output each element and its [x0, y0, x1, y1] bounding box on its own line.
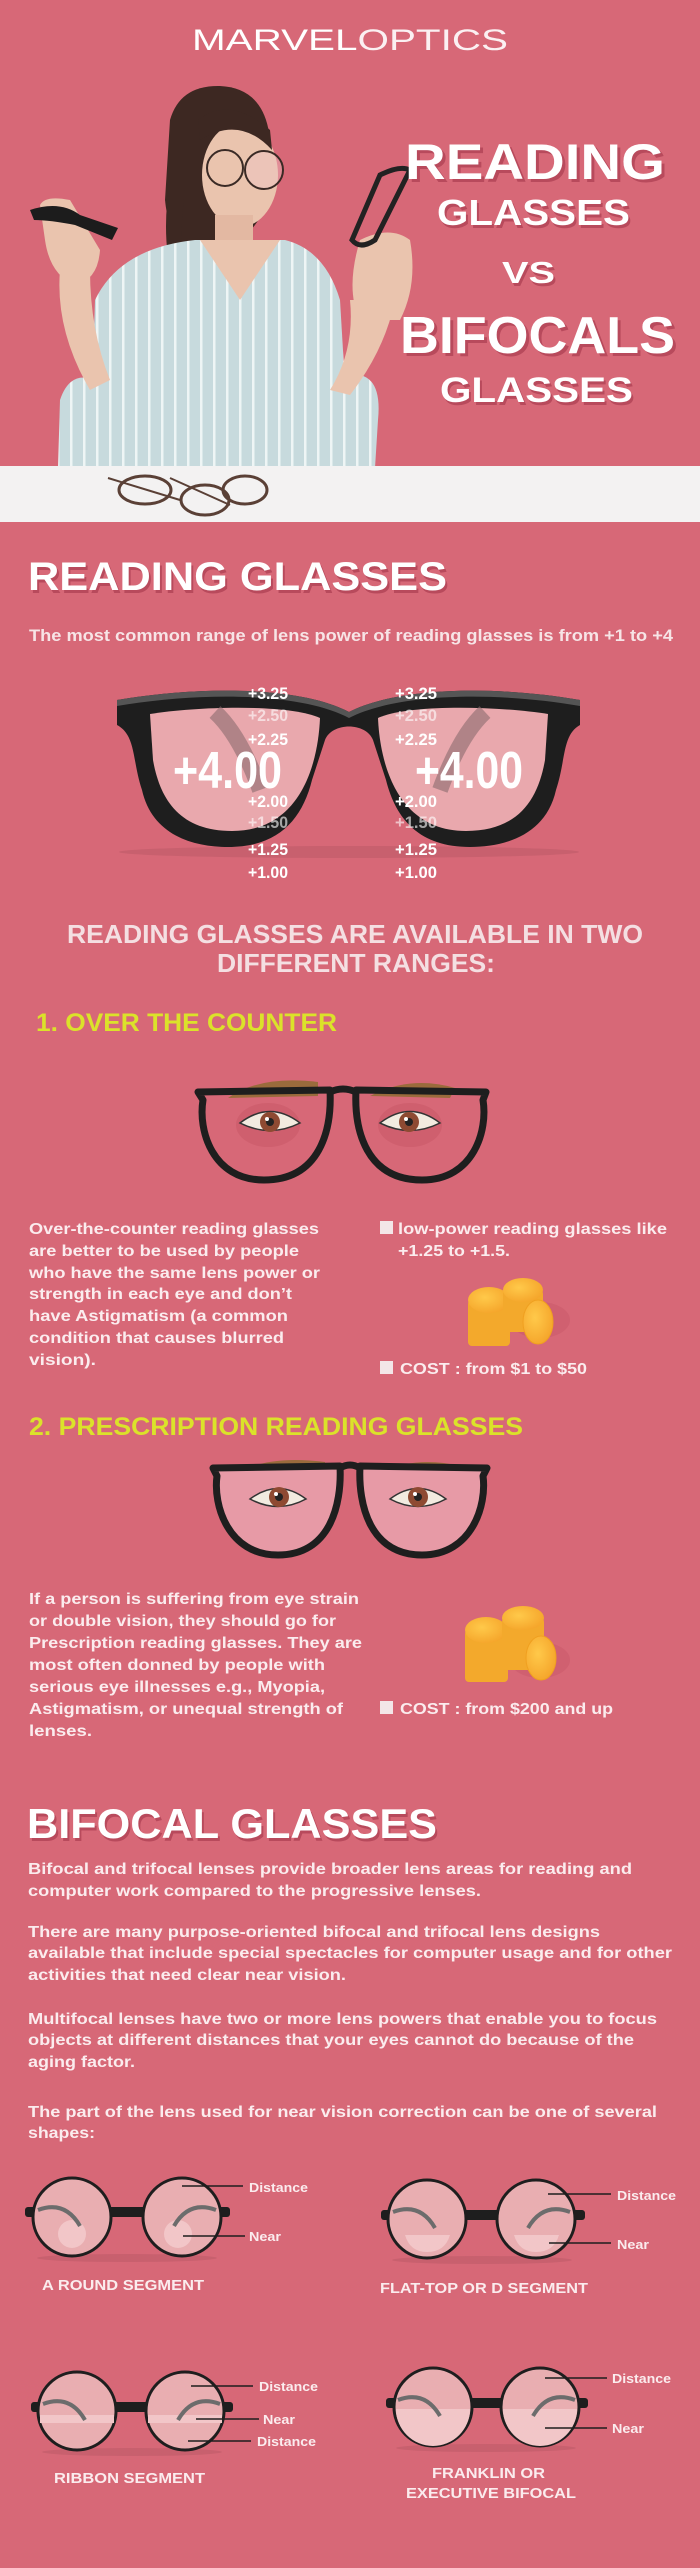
- diagram: ribbon segment: Near: [263, 2412, 295, 2427]
- heading: two ranges: DIFFERENT RANGES:: [217, 948, 495, 978]
- big glasses with lens powers: +2.25: [395, 730, 437, 749]
- big glasses with lens powers: +2.50: [248, 706, 288, 725]
- diagram: round segment: A ROUND SEGMENT: [42, 2278, 204, 2294]
- big glasses with lens powers: +1.00: [395, 863, 437, 882]
- text: bifocal description: available that include special spectacles for computer usage and for other: [28, 1945, 672, 1962]
- bullet: low power: [380, 1221, 667, 1260]
- icon: coins: [468, 1278, 570, 1346]
- big glasses with lens powers: +2.00: [395, 792, 437, 811]
- title: GLASSES: [437, 192, 630, 233]
- diagram: flat-top segment: Distance: [617, 2188, 676, 2203]
- subtitle: lens power range: The most common range of lens power of reading glasses is from +1 to +4: [29, 626, 674, 645]
- heading: reading glasses: READING GLASSES: [30, 558, 449, 602]
- diagram: flat-top segment: [380, 2180, 676, 2297]
- text: over the counter description: condition that causes blurred: [29, 1330, 284, 1347]
- text: prescription description: serious eye illnesses e.g., Myopia,: [29, 1679, 325, 1696]
- text: bifocal description: Bifocal and trifocal lenses provide broader lens areas for reading and: [28, 1861, 632, 1878]
- big glasses with lens powers: +3.25: [395, 684, 437, 703]
- text: prescription description: [29, 1591, 362, 1740]
- text: bifocal description: activities that need clear near vision.: [28, 1967, 346, 1984]
- brand logo: MARVEL OPTICS: [192, 24, 508, 57]
- diagram: round segment: Distance: [249, 2180, 308, 2195]
- cost prescription: COST : from $200 and up: [400, 1701, 613, 1718]
- photo: woman holding glasses: [30, 86, 412, 468]
- text: over the counter description: [28, 1221, 320, 1369]
- diagram: flat-top segment: FLAT-TOP OR D SEGMENT: [380, 2281, 588, 2297]
- title: GLASSES: [439, 195, 632, 236]
- text: prescription description: If a person is suffering from eye strain: [29, 1591, 359, 1608]
- title: [400, 134, 678, 413]
- title: READING: [405, 134, 665, 190]
- heading: bifocal glasses: BIFOCAL GLASSES: [29, 1803, 439, 1850]
- text: over the counter description: are better to be used by people: [29, 1243, 299, 1260]
- diagram: franklin / executive bifocal: EXECUTIVE BIFOCAL: [406, 2486, 576, 2502]
- text: over the counter description: who have the same lens power or: [28, 1265, 320, 1282]
- title: BIFOCALS: [403, 310, 678, 368]
- text: prescription description: lenses.: [29, 1723, 92, 1740]
- subheading: over the counter: 1. OVER THE COUNTER: [36, 1009, 337, 1037]
- big glasses with lens powers: +1.50: [395, 813, 437, 832]
- title: VS: [504, 258, 557, 293]
- text: bifocal description: shapes:: [28, 2125, 95, 2142]
- title: VS: [502, 255, 555, 290]
- title: READING: [408, 137, 668, 193]
- table with glasses: [0, 466, 700, 522]
- big glasses with lens powers: +2.50: [395, 706, 437, 725]
- big glasses with lens powers: +1.00: [248, 863, 288, 882]
- text: bifocal description: aging factor.: [28, 2054, 135, 2071]
- diagram: franklin / executive bifocal: Near: [612, 2421, 644, 2436]
- text: bifocal description: There are many purpose-oriented bifocal and trifocal lens designs: [28, 1924, 600, 1941]
- diagram: ribbon segment: [31, 2372, 318, 2487]
- diagram: franklin / executive bifocal: Distance: [612, 2371, 671, 2386]
- subheading: prescription: 2. PRESCRIPTION READING GLASSES: [29, 1413, 523, 1441]
- diagram: ribbon segment: RIBBON SEGMENT: [54, 2471, 205, 2487]
- heading: reading glasses: READING GLASSES: [28, 555, 447, 599]
- diagram: flat-top segment: Near: [617, 2237, 649, 2252]
- big glasses with lens powers: +1.50: [248, 813, 288, 832]
- text: over the counter description: Over-the-counter reading glasses: [29, 1221, 319, 1238]
- bullet: low power: +1.25 to +1.5.: [398, 1243, 510, 1260]
- diagram: franklin / executive bifocal: FRANKLIN OR: [432, 2466, 546, 2482]
- heading: two ranges: READING GLASSES ARE AVAILABLE IN TWO: [67, 919, 643, 949]
- diagram: round segment: [25, 2178, 308, 2294]
- big glasses with lens powers: +1.25: [248, 840, 288, 859]
- big glasses with lens powers: +4.00: [173, 742, 282, 800]
- big glasses with lens powers: +4.00: [415, 742, 523, 800]
- text: prescription description: or double vision, they should go for: [29, 1613, 336, 1630]
- text: over the counter description: have Astigmatism (a common: [29, 1308, 288, 1325]
- big glasses with lens powers: [117, 684, 580, 882]
- text: over the counter description: vision).: [29, 1352, 96, 1369]
- icon: eyes with tinted prescription glasses: [213, 1460, 487, 1555]
- diagram: round segment: Near: [249, 2229, 281, 2244]
- icon: coins prescription: [465, 1606, 570, 1682]
- text: bifocal description: Multifocal lenses have two or more lens powers that enable you to focus: [28, 2011, 657, 2028]
- text: prescription description: Prescription reading glasses. They are: [29, 1635, 362, 1652]
- text: bifocal description: computer work compared to the progressive lenses.: [28, 1883, 481, 1900]
- title: GLASSES: [440, 371, 633, 410]
- text: prescription description: Astigmatism, or unequal strength of: [29, 1701, 344, 1718]
- text: over the counter description: strength in each eye and don’t: [29, 1286, 293, 1303]
- big glasses with lens powers: +1.25: [395, 840, 437, 859]
- big glasses with lens powers: +2.00: [248, 792, 288, 811]
- text: bifocal description: The part of the lens used for near vision correction can be one of several: [28, 2104, 657, 2121]
- big glasses with lens powers: +2.25: [248, 730, 288, 749]
- diagram: ribbon segment: Distance: [259, 2379, 318, 2394]
- text: prescription description: most often donned by people with: [29, 1657, 325, 1674]
- heading: two ranges: [67, 919, 643, 978]
- diagram: ribbon segment: Distance: [257, 2434, 316, 2449]
- title: BIFOCALS: [400, 307, 675, 365]
- heading: bifocal glasses: BIFOCAL GLASSES: [27, 1800, 437, 1847]
- bullet: low power: low-power reading glasses like: [398, 1221, 667, 1238]
- text: bifocal description: objects at different distances that your eyes cannot do because of the: [28, 2032, 634, 2049]
- title: GLASSES: [442, 374, 635, 413]
- diagram: franklin / executive bifocal: [386, 2368, 671, 2502]
- cost otc: COST : from $1 to $50: [400, 1361, 587, 1378]
- text: bifocal description: [28, 1861, 672, 2142]
- icon: eyes with clear glasses: [198, 1080, 486, 1180]
- big glasses with lens powers: +3.25: [248, 684, 288, 703]
